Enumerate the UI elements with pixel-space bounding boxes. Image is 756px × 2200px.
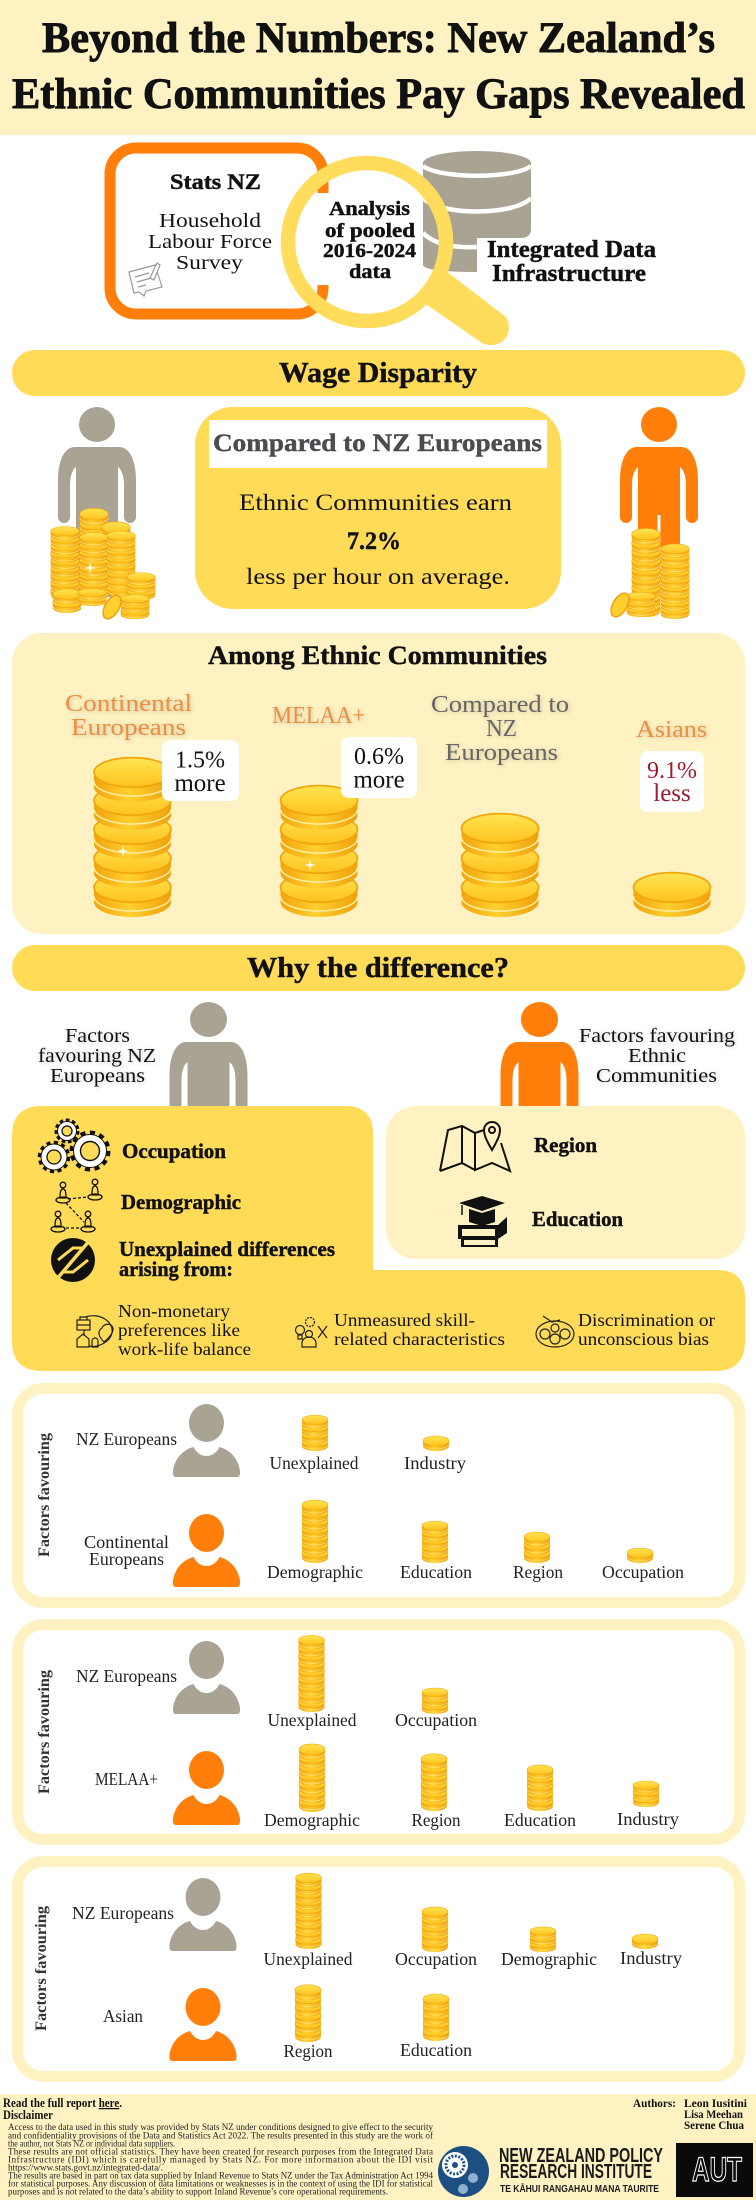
coins and label: Industry [620, 1934, 682, 1968]
label: Education: Education [532, 1207, 623, 1231]
label: factors favouring ethnic communities: Factors favouring [579, 1025, 735, 1047]
avatar: NZ Europeans [169, 1878, 237, 1951]
text: non-monetary preferences: preferences like [118, 1320, 240, 1340]
coins and label: Demographic: Demographic [264, 1810, 360, 1830]
coins and label: Unexplained: Unexplained [268, 1710, 356, 1730]
label: factors favouring ethnic communities: Ethnic [628, 1045, 686, 1067]
authors: Serene Chua [684, 2118, 744, 2132]
disclaimer text: Infrastructure (IDI) which is carefully managed by Stats NZ. For more information about the IDI visit [8, 2154, 433, 2164]
label: compared to NZ Europeans [431, 692, 569, 766]
disclaimer heading: Disclaimer [3, 2108, 53, 2122]
callout: 9.1% less [640, 751, 704, 812]
icon: work-life balance [77, 1316, 113, 1347]
coins and label: Demographic [264, 1744, 360, 1830]
text: discrimination [578, 1310, 715, 1349]
label: Continental Europeans: Europeans [89, 1549, 164, 1569]
coin pile large [51, 508, 155, 622]
label: Continental Europeans: Europeans [71, 715, 186, 741]
coins and label: Education [400, 1521, 472, 1582]
coins and label: Industry [617, 1781, 679, 1829]
icon: skills [296, 1318, 327, 1347]
callout: 9.1% less: less [653, 780, 691, 807]
label: Asian: Asian [103, 2006, 143, 2026]
text: unmeasured skills [334, 1310, 505, 1349]
read the report link: Read the full report here. [3, 2096, 122, 2110]
coins and label: Industry: Industry [617, 1809, 679, 1829]
label: Demographic: Demographic [121, 1190, 241, 1214]
label: NZ Europeans: NZ Europeans [76, 1429, 177, 1449]
figure: ethnic communities person with coins [607, 407, 698, 620]
icon: map with pin [440, 1122, 510, 1171]
coins and label: Unexplained [270, 1415, 358, 1473]
panel heading [209, 420, 547, 468]
coins and label: Region [284, 1985, 332, 2061]
heading: Wage Disparity [12, 350, 745, 396]
rotated axis label: Factors favouring [33, 1906, 50, 2031]
label: factors favouring ethnic communities [579, 1025, 735, 1087]
disclaimer text: Access to the data used in this study was provided by Stats NZ under conditions designed to give effect to the security [8, 2122, 433, 2132]
Stats NZ label: Stats NZ [170, 169, 261, 194]
text: non-monetary preferences: Non-monetary [118, 1301, 230, 1321]
label: Continental Europeans: Continental [65, 691, 192, 717]
rotated axis label: Factors favouring [36, 1670, 53, 1794]
icon: magnifying glass [288, 163, 509, 345]
disclaimer text: https://www.stats.govt.nz/integrated-data/. [8, 2162, 163, 2172]
icon: gears [40, 1120, 108, 1171]
icon: demographic figures [51, 1179, 102, 1232]
heading: Why the difference?: Why the difference? [247, 953, 509, 984]
label: compared to NZ Europeans: NZ [486, 716, 517, 742]
text: non-monetary preferences [118, 1301, 251, 1359]
label: Continental Europeans [84, 1532, 169, 1569]
label: factors favouring NZ Europeans [38, 1025, 156, 1087]
avatar: NZ Europeans [173, 1404, 240, 1477]
coins and label: Industry: Industry [620, 1948, 682, 1968]
disclaimer text: and confidentiality provisions of the Data and Statistics Act 2022. The results presented in this study are the work of [8, 2130, 433, 2140]
lens text: of pooled [325, 220, 416, 242]
callout: 1.5% more: more [174, 770, 226, 797]
label: Asians: Asians [636, 717, 707, 743]
coins: MELAA+ [281, 786, 357, 917]
callout: 1.5% more [162, 740, 239, 801]
coins and label: Occupation: Occupation [395, 1949, 477, 1969]
coins and label: Education [504, 1765, 576, 1830]
callout: 0.6% more: more [353, 766, 405, 794]
statement line 1: Ethnic Communities earn [239, 490, 513, 515]
authors: Lisa Meehan [684, 2107, 743, 2121]
icon: survey form [129, 263, 162, 296]
avatar: Continental Europeans [173, 1514, 240, 1587]
coins and label: Education: Education [504, 1810, 576, 1830]
label: compared to NZ Europeans: Europeans [445, 740, 558, 766]
IDI label: Integrated Data [487, 237, 656, 263]
panel: Continental Europeans breakdown [18, 1388, 740, 1602]
coins and label: Education [400, 1994, 472, 2060]
callout: 1.5% more: 1.5% [175, 748, 225, 774]
coins and label: Region [513, 1532, 563, 1582]
callout: 0.6% more [341, 737, 417, 798]
coins and label: Occupation: Occupation [602, 1562, 684, 1582]
survey name [148, 210, 272, 274]
logo: AUT [676, 2143, 753, 2197]
logo text [499, 2145, 663, 2195]
coins and label: Demographic [267, 1500, 363, 1582]
text: unmeasured skills: Unmeasured skill- [334, 1310, 475, 1330]
text: non-monetary preferences: work-life balance [118, 1339, 251, 1359]
coins and label: Region [412, 1754, 460, 1830]
coin pile small [607, 529, 689, 620]
figure: NZ European with coins [51, 407, 155, 622]
coins and label: Industry [404, 1436, 466, 1473]
icon: discrimination [536, 1316, 574, 1347]
callout: 0.6% more: 0.6% [354, 744, 404, 770]
IDI label: Infrastructure [492, 261, 646, 287]
disclaimer text: the author, not Stats NZ or individual data suppliers. [8, 2139, 175, 2149]
panel heading: Among Ethnic Communities [208, 641, 547, 670]
coins and label: Occupation [602, 1548, 684, 1582]
label: NZ Europeans: NZ Europeans [76, 1666, 177, 1686]
statement line 2: less per hour on average. [246, 564, 510, 589]
lens text [323, 198, 416, 283]
coins: Asians [634, 873, 710, 917]
title line 1: Beyond the Numbers: New Zealand’s [42, 15, 715, 62]
lens text: Analysis [329, 198, 410, 220]
avatar: MELAA+ [173, 1751, 240, 1825]
avatar: Asian [169, 1988, 237, 2061]
label: unexplained differences [119, 1237, 335, 1281]
panel heading: Compared to NZ Europeans [213, 430, 542, 457]
coins: NZ Europeans [462, 814, 538, 917]
coins and label: Occupation: Occupation [395, 1710, 477, 1730]
text: discrimination: unconscious bias [578, 1329, 709, 1349]
label: Continental Europeans: Continental [84, 1532, 169, 1552]
coins and label: Unexplained [268, 1635, 356, 1730]
data sources diagram [110, 148, 656, 345]
label: unexplained differences: arising from: [119, 1257, 233, 1281]
coins and label: Demographic: Demographic [267, 1562, 363, 1582]
label: factors favouring NZ Europeans: Europeans [50, 1065, 145, 1087]
panel: factors favouring ethnic communities [386, 1106, 745, 1259]
coins and label: Education: Education [400, 2040, 472, 2060]
icon: graduation cap on books [458, 1196, 507, 1247]
text: unmeasured skills: related characteristics [334, 1329, 505, 1349]
panel: Asian breakdown [18, 1862, 740, 2076]
survey name: Household [159, 210, 261, 232]
icon: database cylinder [423, 151, 531, 272]
coins and label: Education: Education [400, 1562, 472, 1582]
panel: factors favouring NZ Europeans [12, 1106, 745, 1371]
label: factors favouring ethnic communities: Communities [596, 1065, 717, 1087]
coins and label: Occupation [395, 1907, 477, 1969]
label: MELAA+: MELAA+ [95, 1769, 158, 1789]
logo text: RESEARCH INSTITUTE [500, 2161, 652, 2183]
label: NZ Europeans: NZ Europeans [72, 1903, 174, 1923]
lens text: 2016-2024 [323, 240, 416, 262]
disclaimer text: These results are not official statistics. They have been created for research purposes from the Integrated Data [8, 2146, 433, 2156]
coins and label: Occupation [395, 1688, 477, 1730]
coins and label: Region: Region [513, 1562, 563, 1582]
survey name: Labour Force [148, 231, 272, 253]
lens text: data [349, 261, 391, 283]
heading: Why the difference? [12, 945, 745, 991]
logo text: NEW ZEALAND POLICY [499, 2145, 663, 2167]
logo text: TE KĀHUI RANGAHAU MANA TAURITE [500, 2183, 659, 2195]
disclaimer text: The results are based in part on tax data supplied by Inland Revenue to Stats NZ under the Tax Administration Act 1994 [8, 2170, 433, 2180]
coins and label: Unexplained: Unexplained [270, 1453, 358, 1473]
label: Region: Region [534, 1133, 597, 1157]
label: Occupation: Occupation [122, 1139, 226, 1163]
callout: 9.1% less: 9.1% [647, 758, 697, 784]
disclaimer text: purposes and is not related to the data’s ability to support Inland Revenue’s core operational requirements. [8, 2186, 388, 2196]
title line 2: Ethnic Communities Pay Gaps Revealed [12, 71, 745, 118]
survey name: Survey [176, 252, 243, 274]
IDI label [487, 237, 656, 287]
icon: unexplained [51, 1238, 95, 1282]
figure: person ethnic communities [500, 1002, 578, 1192]
avatar: NZ Europeans [173, 1641, 240, 1714]
authors [633, 2096, 748, 2132]
authors: Authors: [633, 2096, 676, 2110]
authors: Leon Iusitini [684, 2096, 748, 2110]
stat: 7.2%: 7.2% [347, 528, 401, 555]
coins and label: Industry: Industry [404, 1453, 466, 1473]
coins and label: Demographic [501, 1927, 597, 1969]
coins and label: Region: Region [412, 1810, 460, 1830]
panel: MELAA+ breakdown [18, 1624, 740, 1840]
text: discrimination: Discrimination or [578, 1310, 715, 1330]
disclaimer text: for statistical purposes. Any discussion of data limitations or weaknesses is in the context of using the IDI for statistical [8, 2179, 433, 2189]
title banner [0, 0, 756, 135]
label: compared to NZ Europeans: Compared to [431, 692, 569, 718]
figure: person NZ European [170, 1002, 248, 1192]
coins and label: Demographic: Demographic [501, 1949, 597, 1969]
label: factors favouring NZ Europeans: Factors [65, 1025, 130, 1047]
panel: compared to NZ Europeans [195, 407, 561, 609]
label: Continental Europeans [65, 691, 192, 741]
label: MELAA+: MELAA+ [272, 703, 365, 729]
coins and label: Unexplained [264, 1873, 352, 1969]
rotated axis label: Factors favouring [36, 1433, 53, 1557]
logo: NZ Policy Research Institute emblem [438, 2146, 489, 2197]
coins and label: Unexplained: Unexplained [264, 1949, 352, 1969]
label: unexplained differences: Unexplained differences [119, 1237, 335, 1261]
panel: among ethnic communities [12, 633, 745, 934]
coins: Continental Europeans [94, 758, 171, 917]
footer [0, 2094, 756, 2200]
disclaimer text [8, 2122, 433, 2196]
panel: Stats NZ survey box [110, 148, 332, 314]
heading: Wage Disparity: Wage Disparity [279, 358, 477, 389]
label: factors favouring NZ Europeans: favouring NZ [38, 1045, 156, 1067]
coins and label: Region: Region [284, 2041, 332, 2061]
